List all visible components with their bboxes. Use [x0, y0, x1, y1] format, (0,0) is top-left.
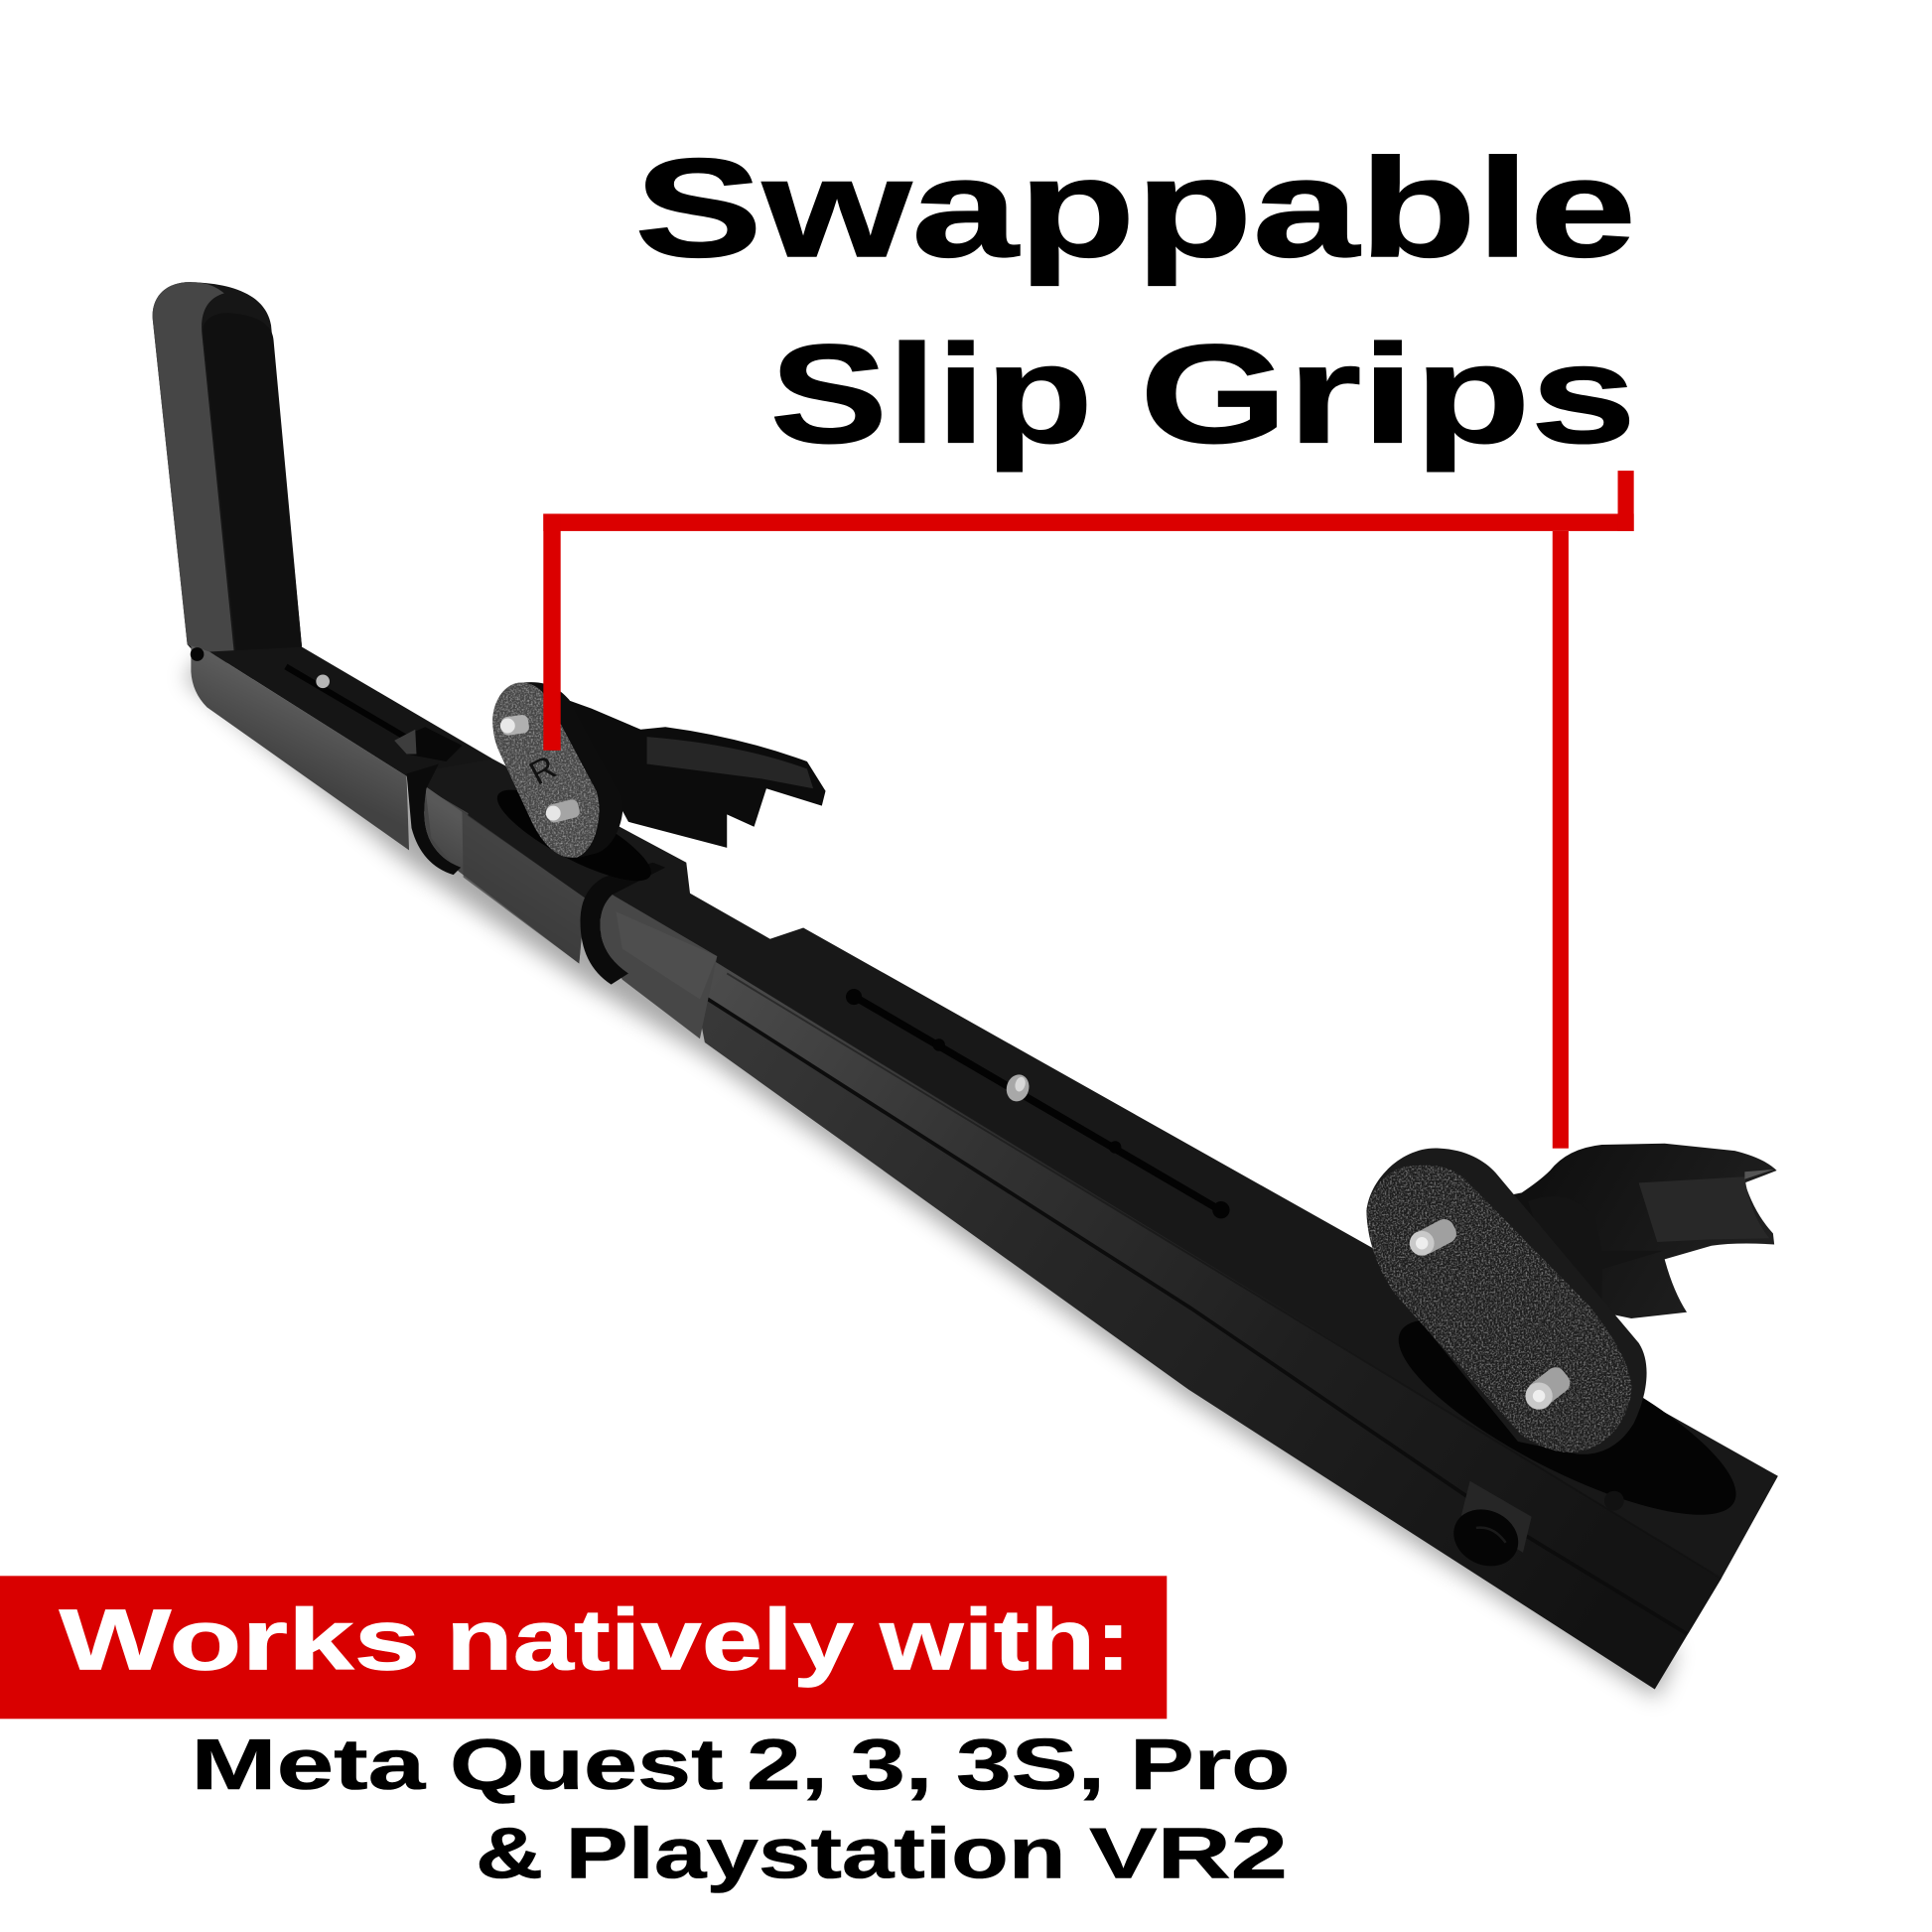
bar shadow — [185, 653, 1676, 1698]
left claw — [561, 697, 826, 848]
callout bracket lines — [543, 471, 1634, 1149]
right slip grip — [1366, 1144, 1777, 1454]
right disc rim — [1366, 1149, 1647, 1454]
compatibility text: 3S, — [956, 1725, 1105, 1805]
handle — [153, 282, 302, 665]
collar and top surface — [407, 759, 1778, 1579]
right disc face — [1366, 1166, 1631, 1452]
compatibility text — [191, 1725, 1290, 1893]
compatibility text: VR2 — [1089, 1814, 1288, 1893]
left screw top — [500, 714, 530, 736]
red banner: Works — [60, 1592, 420, 1689]
product: grip bar accessory — [153, 282, 1778, 1698]
right screw top — [1410, 1216, 1459, 1257]
hinge hole — [191, 647, 204, 661]
compatibility text: Pro — [1130, 1725, 1290, 1805]
compatibility text: 2, — [747, 1725, 828, 1805]
right screw bottom — [1524, 1363, 1574, 1411]
compatibility text: Quest — [450, 1725, 724, 1805]
left disc rim — [523, 682, 622, 858]
left slip grip — [492, 682, 826, 858]
title — [634, 129, 1636, 473]
compatibility text: 3, — [850, 1725, 932, 1805]
red banner — [0, 1576, 1167, 1719]
red banner: natively — [446, 1592, 854, 1689]
red banner: with: — [879, 1592, 1131, 1689]
upper bar slide — [191, 645, 492, 850]
compatibility text: Playstation — [566, 1814, 1066, 1893]
right claw — [1509, 1144, 1777, 1318]
long slot with pin — [846, 989, 1230, 1218]
right oval pocket — [1376, 1284, 1759, 1551]
band sections — [407, 763, 717, 1038]
end mount hole — [1445, 1481, 1532, 1577]
left screw bottom — [545, 798, 581, 824]
lower sleeve with rib — [697, 960, 1722, 1690]
left oval pocket — [487, 774, 661, 897]
left disc face — [492, 683, 600, 858]
compatibility text: & — [476, 1814, 543, 1893]
compatibility text: Meta — [191, 1725, 427, 1805]
title: Slip — [770, 316, 1093, 473]
left grip letter R: R — [524, 749, 562, 792]
title: Grips — [1140, 316, 1636, 473]
title: Swappable — [634, 129, 1636, 286]
